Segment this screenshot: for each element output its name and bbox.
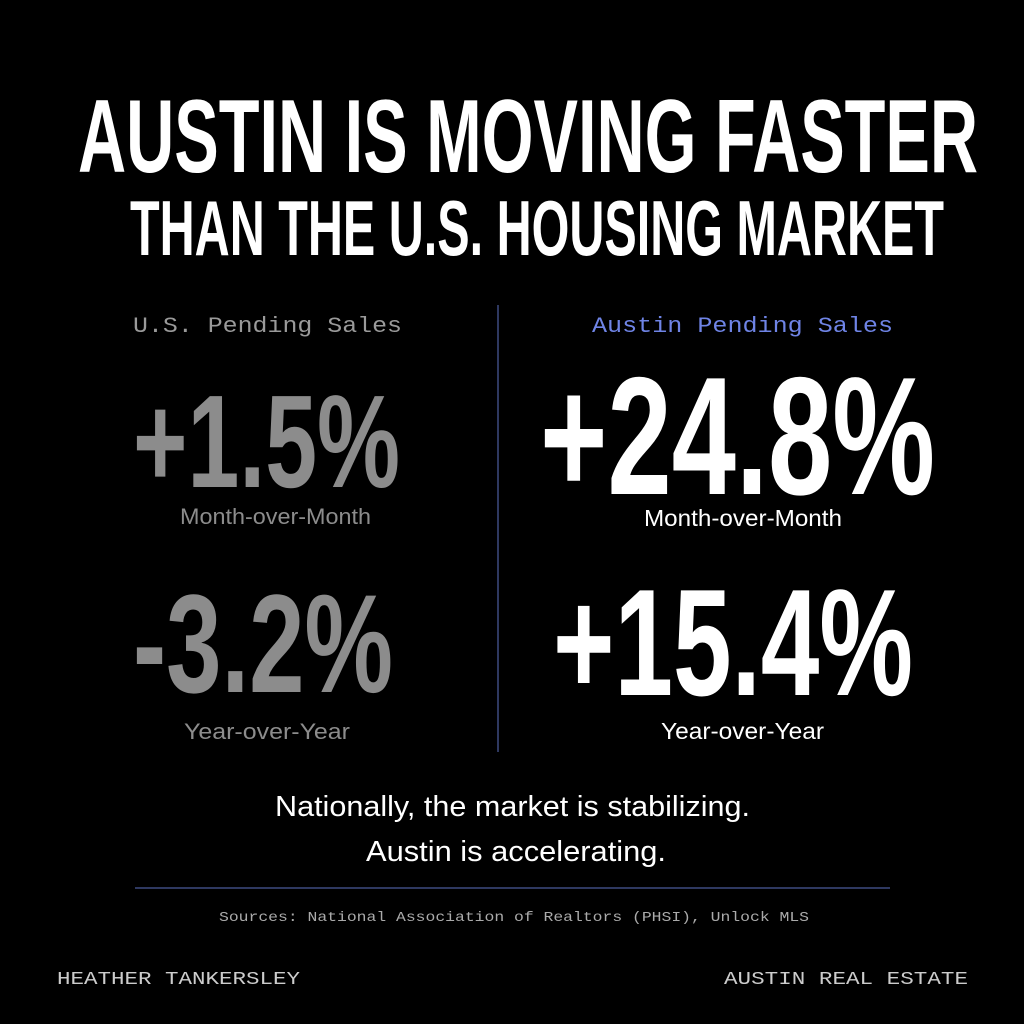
label: Month-over-Month: Month-over-Month <box>644 505 842 531</box>
sources: Sources: National Association of Realtors (PHSI), Unlock MLS <box>219 910 809 926</box>
label: Year-over-Year: Year-over-Year <box>184 719 350 744</box>
summary text: Austin is accelerating. <box>366 836 666 868</box>
title <box>78 79 978 272</box>
panel: U.S. pending sales <box>133 314 402 744</box>
stat: -3.2%: -3.2% <box>133 565 393 722</box>
heading: Austin Pending Sales: Austin Pending Sales <box>592 314 893 339</box>
footer: name: HEATHER TANKERSLEY <box>57 970 300 990</box>
label: Month-over-Month: Month-over-Month <box>180 504 371 529</box>
panel: Austin pending sales <box>540 314 935 744</box>
summary text <box>275 791 750 868</box>
label: Year-over-Year: Year-over-Year <box>661 718 824 744</box>
footer: brand: AUSTIN REAL ESTATE <box>724 970 968 990</box>
heading: U.S. Pending Sales: U.S. Pending Sales <box>133 314 402 339</box>
summary text: Nationally, the market is stabilizing. <box>275 791 750 823</box>
stat: +1.5%: +1.5% <box>133 368 400 515</box>
